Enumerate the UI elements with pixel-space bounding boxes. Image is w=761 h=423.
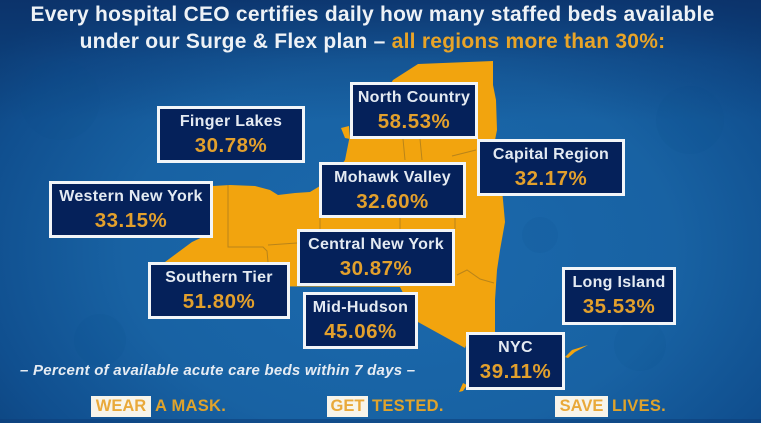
panel: Finger Lakes: Finger Lakes: [180, 113, 282, 130]
slogan: save lives: [555, 396, 666, 417]
panel: Capital Region: [477, 139, 625, 196]
panel: Mid-Hudson: Mid-Hudson: [313, 299, 408, 316]
panel: Central New York: [297, 229, 455, 286]
panel: Western New York: [49, 181, 213, 238]
panel: NYC: 39.11%: [480, 360, 551, 383]
panel: Central New York: Central New York: [308, 236, 444, 253]
slogan: wear a mask: [91, 396, 226, 417]
panel: Long Island: 35.53%: [583, 295, 655, 318]
panel: Central New York: 30.87%: [340, 257, 412, 280]
panel: Finger Lakes: 30.78%: [195, 134, 267, 157]
slogan: get tested: GET: [331, 397, 364, 415]
panel: Capital Region: 32.17%: [515, 167, 587, 190]
slogan: wear a mask: WEAR: [96, 397, 146, 415]
panel: North Country: North Country: [358, 89, 470, 106]
panel: North Country: [350, 82, 478, 139]
panel: Western New York: 33.15%: [95, 209, 167, 232]
slogan: get tested: TESTED.: [372, 397, 444, 415]
title: Every hospital CEO certifies daily how many staffed beds available: [30, 3, 715, 26]
panel: Capital Region: Capital Region: [493, 146, 609, 163]
panel: Southern Tier: Southern Tier: [165, 269, 273, 286]
panel: NYC: [466, 332, 565, 390]
title: under our Surge & Flex plan – all regions more than 30%:: [80, 30, 665, 53]
panel: Mid-Hudson: [303, 292, 418, 349]
panel: Western New York: Western New York: [59, 188, 203, 205]
panel: Mohawk Valley: Mohawk Valley: [334, 169, 451, 186]
panel: NYC: NYC: [498, 339, 533, 356]
panel: Southern Tier: 51.80%: [183, 290, 255, 313]
panel: Southern Tier: [148, 262, 290, 319]
title: [30, 3, 715, 53]
panel: Long Island: Long Island: [572, 274, 666, 291]
slogan: save lives: LIVES.: [612, 397, 666, 415]
panel: North Country: 58.53%: [378, 110, 450, 133]
panel: Long Island: [562, 267, 676, 325]
panel: Finger Lakes: [157, 106, 305, 163]
panel: Mid-Hudson: 45.06%: [324, 320, 397, 343]
slogan: wear a mask: A MASK.: [155, 397, 226, 415]
slogan: save lives: SAVE: [560, 397, 603, 415]
panel: Mohawk Valley: [319, 162, 466, 218]
panel: Mohawk Valley: 32.60%: [356, 190, 429, 213]
slogan: get tested: [327, 396, 444, 417]
footnote: – Percent of available acute care beds within 7 days –: [20, 362, 415, 379]
